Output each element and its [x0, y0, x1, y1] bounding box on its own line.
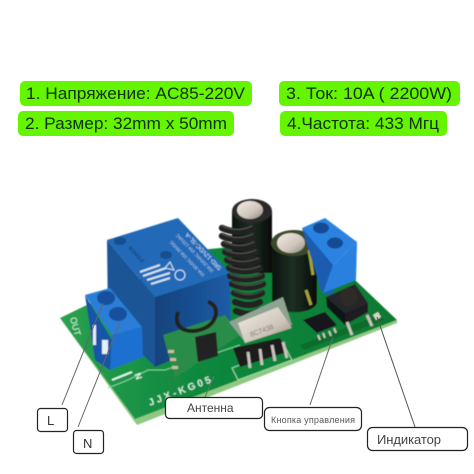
label: N: N: [83, 436, 92, 451]
spec pill: size: 2. Размер: 32mm x 50mm: [25, 115, 227, 133]
pointer line: antenna: [205, 376, 214, 397]
spec pill: current: 3. Ток: 10A ( 2200W): [286, 85, 452, 103]
panel: specifications: [18, 81, 460, 136]
relay: SRD-12VDC-SL-A: [185, 231, 223, 271]
receiver module with chip: [163, 302, 240, 378]
relay: 10A 250VAC 10A 125VAC: [174, 232, 215, 274]
capacitor front: [271, 230, 317, 312]
label: indicator: [368, 428, 468, 450]
pointer line: N: [78, 322, 120, 427]
spec pill: frequency: [280, 111, 447, 136]
spec pill: voltage: 1. Напряжение: AC85-220V: [26, 85, 245, 103]
relay: SONGLE: [127, 245, 146, 265]
label: indicator: Индикатор: [377, 432, 441, 447]
spec pill: size: [18, 111, 234, 136]
green board: JJX-KG05: [147, 375, 213, 409]
indicator LED: [373, 312, 381, 320]
crystal oscillator: 8C7438: [249, 324, 275, 339]
crystal oscillator: [229, 297, 292, 343]
left screw terminal: [85, 288, 143, 370]
control IC: [303, 312, 337, 340]
green board: [60, 240, 397, 425]
tactile button: [326, 284, 372, 335]
spec pill: voltage: [20, 81, 252, 106]
label: control button: Кнопка управления: [271, 415, 355, 425]
label: antenna: [166, 398, 262, 418]
pointer line: control button: [310, 337, 333, 405]
green board: N: [133, 371, 144, 381]
relay: [107, 218, 231, 367]
label: control button: [264, 408, 362, 430]
pointer line: L: [62, 303, 103, 405]
right screw terminal: [302, 218, 357, 295]
label: N: [74, 430, 104, 454]
pin header: [233, 338, 287, 368]
pointer line: indicator: [377, 317, 415, 427]
relay: 10A 30VDC 10A 28VDC: [168, 239, 206, 278]
label: antenna: Антенна: [187, 401, 234, 415]
spec pill: frequency: 4.Частота: 433 Мгц: [287, 115, 440, 133]
label: L: [38, 408, 68, 432]
spec pill: current: [279, 81, 460, 106]
label: L: L: [47, 413, 54, 428]
green board: OUT: [68, 316, 83, 337]
capacitor rear: [232, 199, 272, 273]
antenna coil: [222, 226, 263, 314]
circuit board module illustration: [60, 199, 397, 425]
